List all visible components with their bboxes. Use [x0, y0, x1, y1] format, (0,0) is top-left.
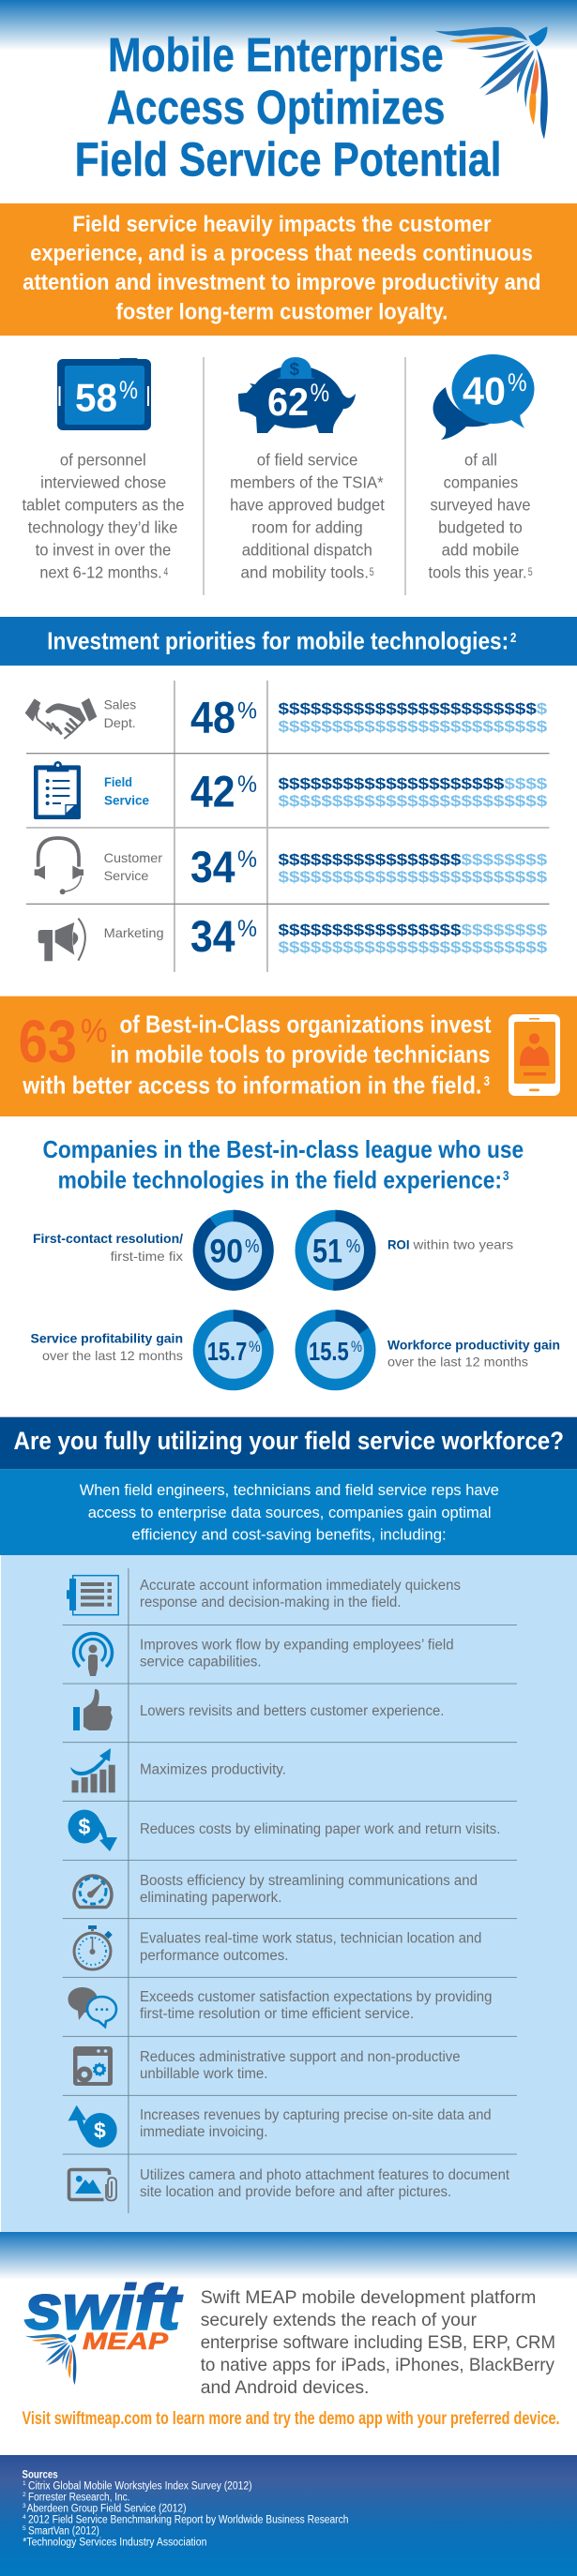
icon: tablet	[57, 358, 151, 430]
dollar bar 48: $$$$$$$$$$$$$$$$$$$$$$$$	[278, 701, 537, 718]
text: Boosts efficiency by streamlining communications and	[140, 1873, 478, 1889]
text: performance outcomes.	[140, 1948, 289, 1964]
label: Service	[104, 792, 149, 807]
icon: gauge	[74, 1876, 112, 1907]
label	[387, 1337, 560, 1370]
icon: broadcast person	[74, 1634, 112, 1676]
heading band: investment priorities	[0, 617, 577, 666]
heading band: investment priorities: 2	[510, 630, 516, 646]
bottom gradient	[0, 2232, 577, 2280]
row: marketing	[38, 911, 547, 961]
icon: settings window	[73, 2046, 113, 2086]
text: Exceeds customer satisfaction expectations by providing	[140, 1989, 492, 2005]
panel: sources: SmartVan (2012)	[28, 2525, 99, 2537]
text	[140, 1578, 461, 1610]
text: Reduces costs by eliminating paper work and return visits.	[140, 1821, 500, 1837]
panel: intro to benefits: When field engineers, technicians and field service reps have	[80, 1481, 499, 1499]
dollar bar 34: $$$$$$$$	[462, 921, 547, 938]
panel: sources: Citrix Global Mobile Workstyles Index Survey (2012)	[28, 2480, 252, 2492]
row: sales dept	[25, 693, 547, 742]
panel: sources: 2012 Field Service Benchmarking Report by Worldwide Business Research	[28, 2514, 348, 2525]
donut 90 percent	[193, 1210, 274, 1291]
icon: handshake	[25, 698, 97, 739]
label: over the last 12 months	[42, 1348, 183, 1363]
dollar bar 48: $	[537, 701, 547, 718]
label: Customer	[104, 850, 162, 865]
panel: intro to benefits: access to enterprise data sources, companies gain optimal	[88, 1504, 492, 1521]
value 48 percent: 48	[190, 693, 235, 742]
icon: clipboard	[34, 761, 81, 819]
panel: intro to benefits: efficiency and cost-saving benefits, including:	[131, 1526, 447, 1544]
stat: 62 percent piggy bank	[230, 357, 385, 582]
benefit: administrative support	[73, 2046, 461, 2086]
label: Sales	[104, 697, 136, 712]
text: budget mobile tools stat: add mobile	[442, 541, 519, 560]
text: first-time resolution or time efficient service.	[140, 2006, 414, 2022]
icon: headset	[35, 838, 84, 894]
panel: orange intro: experience, and is a process that needs continuous	[30, 241, 533, 266]
label: first-time fix	[111, 1249, 183, 1264]
benefit: costs	[68, 1809, 500, 1851]
text	[140, 1931, 481, 1964]
value 42 percent: %	[237, 771, 257, 798]
dollar bar 42: $$$$$$$$$$$$$$$$$$$$$$$$$	[278, 793, 547, 810]
top gradient	[0, 0, 577, 51]
text: tablet stat: 4	[163, 565, 168, 578]
heading band: investment priorities: Investment priorities for mobile technologies:	[47, 627, 509, 655]
benefit: customer satisfaction	[68, 1987, 492, 2027]
value 63 percent: %	[81, 1013, 107, 1050]
heading: best-in-class league: Companies in the Best-in-class league who use	[43, 1135, 524, 1163]
panel: orange intro: foster long-term customer loyalty.	[116, 300, 448, 324]
callout text: 3	[484, 1073, 490, 1089]
panel: sources: Forrester Research, Inc.	[28, 2492, 129, 2503]
value 34 percent: %	[237, 846, 257, 873]
metric: service profitability gain	[30, 1310, 274, 1390]
text: swift meap description: to native apps for iPads, iPhones, BlackBerry	[201, 2355, 554, 2375]
dollar bar 48: $$$$$$$$$$$$$$$$$$$$$$$$$	[278, 718, 547, 735]
text: swift meap description: enterprise software including ESB, ERP, CRM	[201, 2332, 555, 2353]
column dividers	[203, 357, 406, 595]
benefit: real-time status	[74, 1925, 481, 1969]
text: response and decision-making in the field.	[140, 1595, 402, 1610]
value 48 percent: %	[237, 698, 257, 725]
heading: best-in-class league: 3	[503, 1168, 509, 1184]
donut 15.5 percent: %	[351, 1338, 362, 1355]
icon: photo with paperclip	[69, 2169, 118, 2202]
text: budget mobile tools stat: surveyed have	[430, 496, 531, 515]
dollar bar 34	[278, 921, 547, 956]
title: Field Service Potential	[75, 133, 501, 187]
label	[104, 774, 149, 807]
label: Dept.	[104, 715, 136, 730]
value 63 percent: 63	[19, 1008, 77, 1075]
label	[104, 850, 162, 883]
text: Reduces administrative support and non-productive	[140, 2049, 461, 2065]
text: budget stat: and mobility tools.	[240, 563, 369, 582]
icon: dollar with down arrow: $	[79, 1815, 90, 1839]
stat: 58 percent tablet	[23, 358, 184, 582]
text: budget mobile tools stat: 5	[528, 565, 533, 578]
text: Maximizes productivity.	[140, 1762, 286, 1778]
dollar bar 42: $$$$	[504, 776, 547, 793]
donut 15.7 percent	[193, 1310, 274, 1390]
panel: 63 percent callout	[0, 996, 577, 1116]
row: field service	[34, 761, 547, 819]
text: immediate invoicing.	[140, 2124, 268, 2140]
text: budget stat: members of the TSIA*	[230, 473, 384, 492]
text: budget stat: 5	[370, 565, 374, 578]
text: tablet stat: next 6-12 months.	[39, 563, 162, 582]
icon: speech bubbles	[433, 354, 535, 440]
dollar bar 34: $$$$$$$$$$$$$$$$$$$$$$$$$	[278, 939, 547, 956]
benefit: account information	[67, 1576, 461, 1615]
donut 15.5 percent	[295, 1310, 375, 1390]
icon: document	[67, 1576, 118, 1615]
panel: benefits list	[1, 1555, 577, 2232]
icon: dollar with down arrow	[68, 1809, 117, 1851]
panel: orange intro: attention and investment to improve productivity and	[23, 270, 541, 295]
dollar bar 34: $$$$$$$$$$$$$$$$$	[278, 851, 462, 868]
donut 51 percent: 51	[312, 1234, 342, 1270]
title: Access Optimizes	[107, 81, 445, 134]
label: Field	[104, 774, 132, 789]
text: swift meap description	[201, 2287, 555, 2398]
text: unbillable work time.	[140, 2066, 268, 2082]
icon: speech bubbles: %	[508, 368, 527, 397]
text: budget stat: room for adding	[251, 518, 363, 537]
stat: 40 percent speech bubbles	[428, 354, 535, 582]
text: budget stat	[230, 451, 385, 582]
donut 15.7 percent: 15.7	[207, 1337, 247, 1366]
donut 15.7 percent: %	[249, 1338, 261, 1355]
donut 51 percent: %	[346, 1236, 360, 1257]
text	[140, 1989, 492, 2022]
panel: sources: 1	[23, 2480, 26, 2487]
icon: stopwatch	[74, 1925, 113, 1969]
panel: orange intro	[0, 203, 577, 336]
benefit: efficiency	[74, 1873, 478, 1907]
label	[104, 697, 136, 730]
icon: phone with person	[509, 1014, 560, 1096]
donut 90 percent: 90	[210, 1234, 243, 1270]
icon: speech bubbles: 40	[463, 369, 506, 413]
panel: sources: 3	[23, 2503, 26, 2509]
donut 15.5 percent: 15.5	[309, 1337, 349, 1366]
donut 51 percent	[295, 1210, 375, 1291]
logo: swift meap: MEAP	[83, 2329, 168, 2355]
value 42 percent: 42	[190, 767, 235, 816]
benefit: revenues	[68, 2105, 492, 2148]
benefit: work flow	[74, 1634, 454, 1676]
callout text	[22, 1012, 492, 1100]
label	[33, 1231, 183, 1264]
text: swift meap description: securely extends the reach of your	[201, 2310, 477, 2330]
icon: tablet: 58	[75, 376, 117, 420]
text: budget mobile tools stat: tools this year.	[428, 563, 527, 582]
text	[140, 2049, 461, 2082]
label	[30, 1330, 183, 1363]
dollar bar 34: $$$$$$$$	[462, 851, 547, 868]
value 34 percent: 34	[190, 911, 235, 961]
text: budget stat: additional dispatch	[242, 541, 372, 560]
callout text: of Best-in-Class organizations invest	[120, 1012, 492, 1039]
title	[75, 28, 501, 187]
text: eliminating paperwork.	[140, 1890, 281, 1906]
icon: rising bar chart	[70, 1748, 115, 1792]
icon: chat bubbles	[68, 1987, 116, 2027]
icon: piggy bank	[238, 357, 356, 433]
label: ROI	[387, 1237, 409, 1252]
text	[140, 2167, 510, 2200]
label: Service profitability gain	[30, 1330, 183, 1345]
label: over the last 12 months	[387, 1355, 528, 1370]
dollar bar 34: $$$$$$$$$$$$$$$$$$$$$$$$$	[278, 869, 547, 886]
text: tablet stat: to invest in over the	[36, 541, 171, 560]
list grid lines	[63, 1568, 517, 2213]
icon: megaphone	[38, 919, 85, 961]
label: Service	[104, 868, 149, 883]
label: First-contact resolution/	[33, 1231, 183, 1246]
panel: sources: Aberdeen Group Field Service (2012)	[27, 2503, 187, 2514]
text: Lowers revisits and betters customer experience.	[140, 1703, 444, 1719]
metric: first-contact resolution	[33, 1210, 274, 1291]
metric: workforce productivity gain	[295, 1310, 560, 1390]
text	[140, 2107, 492, 2140]
panel: orange intro: Field service heavily impacts the customer	[72, 212, 492, 237]
text	[140, 1873, 478, 1906]
text: Accurate account information immediately quickens	[140, 1578, 461, 1594]
title: Mobile Enterprise	[108, 28, 444, 82]
text: budget stat: of field service	[257, 451, 357, 470]
benefit: productivity	[70, 1748, 286, 1792]
label: Marketing	[104, 925, 164, 940]
text: Increases revenues by capturing precise on-site data and	[140, 2107, 492, 2123]
panel: sources: 2	[23, 2492, 26, 2498]
dollar bar 34	[278, 851, 547, 886]
text: site location and provide before and after pictures.	[140, 2184, 451, 2200]
text: Improves work flow by expanding employees’ field	[140, 1637, 454, 1653]
text: budget mobile tools stat: companies	[444, 473, 518, 492]
label: Workforce productivity gain	[387, 1337, 560, 1352]
callout text: with better access to information in the field.	[22, 1073, 481, 1100]
icon: swift bird logo	[434, 26, 548, 139]
text: tablet stat: technology they’d like	[28, 518, 177, 537]
value 34 percent: %	[237, 916, 257, 942]
text: Evaluates real-time work status, technician location and	[140, 1931, 481, 1947]
panel: sources: Sources	[23, 2469, 58, 2480]
text: budget mobile tools stat	[428, 451, 533, 582]
value 34 percent: 34	[190, 842, 235, 891]
text: budget mobile tools stat: budgeted to	[438, 518, 523, 537]
metric: ROI	[295, 1210, 513, 1291]
heading band: fully utilizing workforce	[0, 1417, 577, 1469]
donut 90 percent: %	[245, 1236, 260, 1257]
logo: swift meap: swift	[24, 2271, 183, 2343]
heading: best-in-class league: mobile technologies in the field experience:	[58, 1165, 502, 1193]
panel: sources: 5	[23, 2525, 26, 2532]
benefit: revisits	[73, 1689, 444, 1730]
text: budget stat: have approved budget	[230, 496, 385, 515]
table grid lines	[26, 681, 550, 972]
dollar bar 42	[278, 776, 547, 810]
dollar bar 34: $$$$$$$$$$$$$$$$$	[278, 921, 462, 938]
icon: piggy bank: %	[311, 379, 329, 407]
panel: sources: 4	[23, 2514, 26, 2521]
icon: dollar with up arrow: $	[94, 2119, 106, 2143]
benefit: camera and photo	[69, 2167, 510, 2202]
icon: tablet: %	[119, 376, 138, 404]
text: tablet stat	[23, 451, 184, 582]
dollar bar 42: $$$$$$$$$$$$$$$$$$$$$	[278, 776, 504, 793]
icon: piggy bank: $	[289, 360, 300, 380]
icon: thumbs up	[73, 1689, 113, 1730]
text: budget mobile tools stat: of all	[464, 451, 497, 470]
row: customer service	[35, 838, 547, 894]
panel: sources: *Technology Services Industry Association	[23, 2537, 206, 2548]
icon: piggy bank: 62	[267, 380, 309, 424]
callout text: in mobile tools to provide technicians	[111, 1041, 490, 1068]
text: tablet stat: of personnel	[60, 451, 146, 470]
icon: dollar with up arrow	[68, 2105, 117, 2148]
panel: intro to benefits	[0, 1469, 577, 1555]
text: tablet stat: tablet computers as the	[23, 496, 184, 515]
text: service capabilities.	[140, 1654, 261, 1670]
text: Utilizes camera and photo attachment features to document	[140, 2167, 510, 2183]
text: tablet stat: interviewed chose	[40, 473, 166, 492]
heading: best-in-class league	[43, 1135, 524, 1193]
dollar bar 48	[278, 701, 547, 735]
label: within two years	[412, 1237, 513, 1252]
text: swift meap description: Swift MEAP mobile development platform	[201, 2287, 536, 2308]
text	[140, 1637, 454, 1670]
logo: swift meap	[24, 2271, 183, 2385]
text: swift meap description: and Android devices.	[201, 2377, 369, 2398]
panel: sources	[0, 2455, 577, 2576]
